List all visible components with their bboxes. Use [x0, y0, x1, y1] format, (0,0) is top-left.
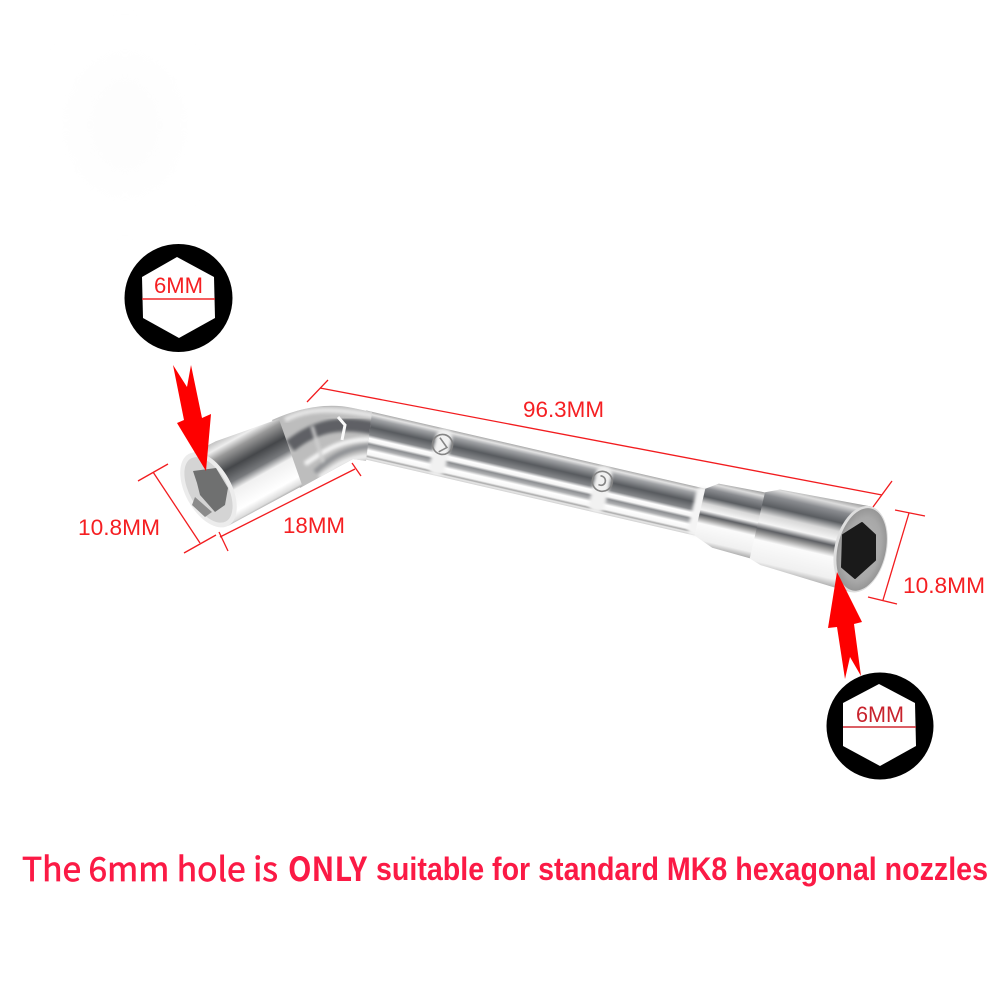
infographic canvas — [22, 244, 987, 886]
left hole shadow — [192, 497, 212, 517]
head — [747, 482, 871, 592]
dimension: 96.3MM overall length — [307, 380, 892, 507]
label: 10.8MM right: 10.8MM — [903, 573, 985, 598]
embossed logo 1 — [426, 428, 456, 477]
elbow bend — [272, 406, 372, 488]
embossed logo 2 — [586, 464, 615, 514]
icon: left 6MM hexagon — [124, 244, 232, 352]
icon: left 6MM hexagon: 6MM — [154, 273, 203, 298]
dimension: 10.8MM right diameter — [868, 510, 925, 604]
head end face — [825, 500, 896, 598]
wrench — [180, 406, 888, 592]
caption: ONLY — [288, 843, 368, 891]
icon: right 6MM hexagon: 6MM — [856, 702, 904, 727]
dimension: 10.8MM left diameter — [138, 464, 216, 553]
label: 18MM: 18MM — [283, 513, 345, 538]
left socket body — [168, 407, 313, 538]
left hex socket hole — [193, 468, 228, 512]
caption: The 6mm hole is — [22, 843, 278, 891]
collar — [692, 479, 770, 560]
faint background smudge — [75, 60, 175, 190]
dimension: 18MM socket depth — [219, 463, 361, 551]
shaft ring — [687, 486, 710, 537]
icon: right 6MM hexagon — [826, 672, 934, 780]
label: 96.3MM: 96.3MM — [523, 397, 604, 422]
arrow: right red arrow — [828, 572, 862, 679]
straight handle and collar, rotated to shaft axis — [351, 391, 896, 598]
shaft — [355, 410, 711, 537]
left socket end face — [168, 443, 248, 537]
caption — [22, 843, 988, 891]
label: 10.8MM left: 10.8MM — [78, 515, 160, 540]
right hex socket hole — [842, 523, 875, 578]
arrow: left red arrow — [173, 365, 211, 471]
